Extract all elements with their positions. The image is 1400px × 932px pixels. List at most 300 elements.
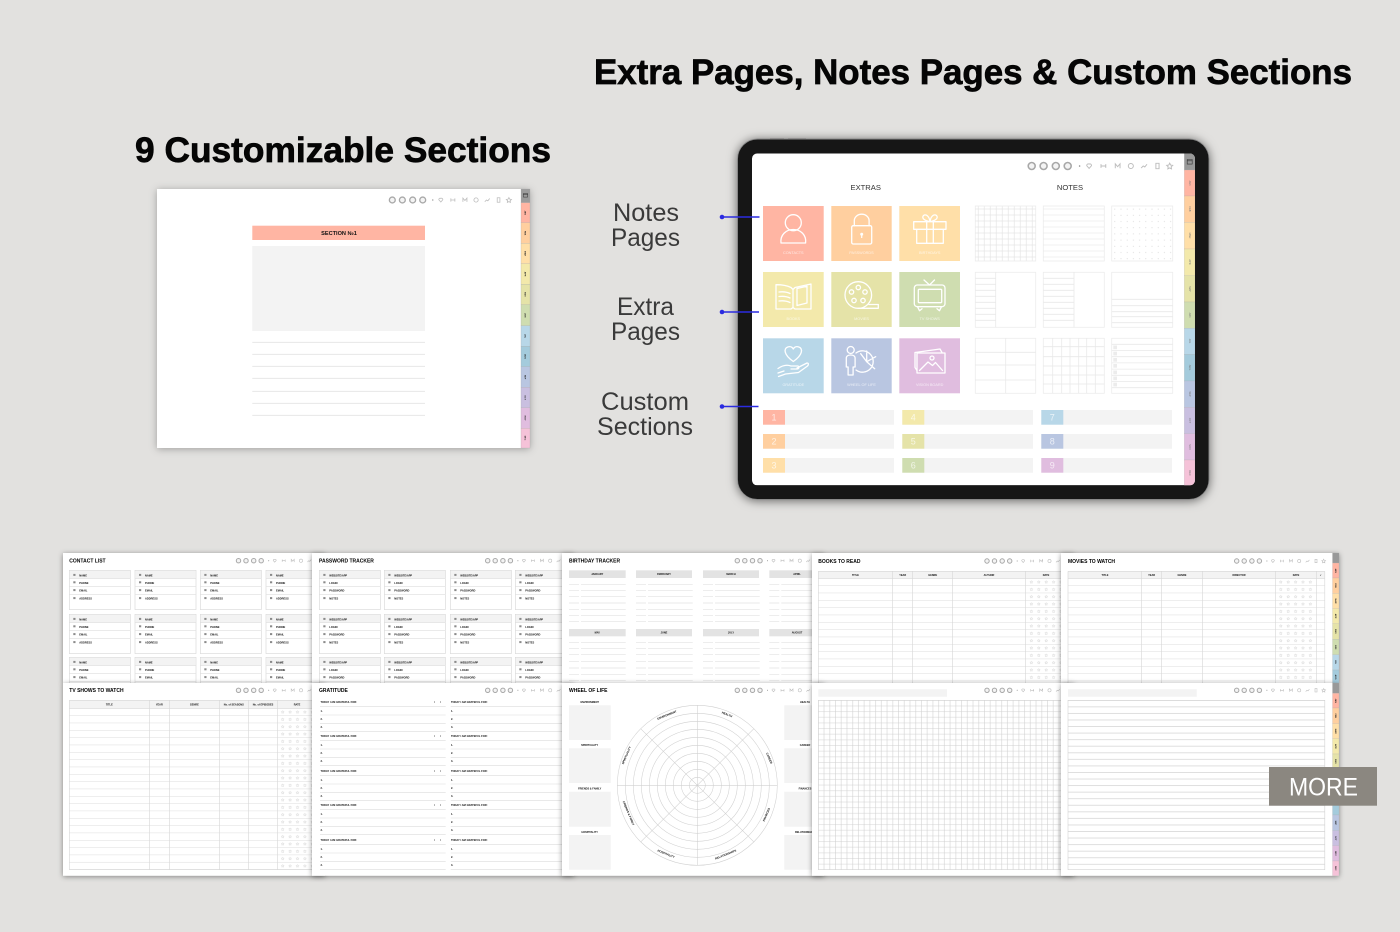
note thumbnails xyxy=(975,206,1173,393)
heading: wheel of life: WHEEL OF LIFE xyxy=(569,688,608,694)
panel: books to read page xyxy=(812,553,1076,683)
gratitude lists: 2. xyxy=(451,717,453,721)
gratitude lists: 1. xyxy=(451,778,453,782)
panel: section page preview: JAN xyxy=(524,211,527,215)
panel: section page preview: OCT xyxy=(524,395,526,400)
gratitude lists: 3. xyxy=(320,725,323,729)
password cards: NOTES xyxy=(394,641,404,645)
gratitude lists xyxy=(320,700,576,869)
contact cards: PHONE xyxy=(145,581,154,585)
contact cards: NAME xyxy=(276,574,284,578)
title field xyxy=(1068,689,1197,697)
tile: books xyxy=(763,272,824,327)
wheel chart: SPIRITUALITY xyxy=(621,746,632,765)
panel: section page preview: SEP xyxy=(524,375,526,380)
gratitude lists: TODAY I AM GRATEFUL FOR: xyxy=(320,734,357,738)
gratitude lists: 1. xyxy=(451,743,453,747)
month headers xyxy=(569,570,825,636)
contact cards: NAME xyxy=(79,661,87,665)
section header: SECTION №1 xyxy=(321,231,357,237)
wheel chart: HEALTH xyxy=(721,710,733,718)
panel: movies to watch page: MAY xyxy=(1334,629,1337,634)
toolbar xyxy=(1234,688,1326,692)
password cards: WEBSITE/APP xyxy=(525,574,543,578)
gratitude lists: / xyxy=(440,838,441,842)
gratitude lists: / xyxy=(440,803,441,807)
gratitude lists: 1. xyxy=(451,812,453,816)
books table: AUTHOR xyxy=(984,574,995,577)
wheel chart xyxy=(617,705,777,865)
panel: movies to watch page: JUL xyxy=(1334,660,1336,665)
contact cards: EMAIL xyxy=(276,633,284,637)
gratitude lists: TODAY I AM GRATEFUL FOR: xyxy=(451,700,488,704)
toolbar xyxy=(236,688,327,692)
heading: birthday tracker: BIRTHDAY TRACKER xyxy=(569,558,621,564)
password cards: PASSWORD xyxy=(394,633,410,637)
tablet body xyxy=(738,139,1209,500)
movies table: DIRECTOR xyxy=(1232,574,1246,577)
panel: lined notes page: OCT xyxy=(1334,836,1336,841)
password cards: PASSWORD xyxy=(329,589,345,593)
panel: movies to watch page: FEB xyxy=(1334,583,1336,588)
ruled lines xyxy=(1068,700,1325,870)
contact cards: EMAIL xyxy=(79,633,88,637)
section header xyxy=(252,226,425,240)
custom section bars: 8 xyxy=(1050,436,1055,446)
side note boxes: FINANCES xyxy=(799,787,812,790)
gratitude lists: / xyxy=(434,734,435,738)
password cards: LOGIN xyxy=(329,625,338,629)
gratitude lists: TODAY I AM GRATEFUL FOR: xyxy=(320,700,357,704)
wheel chart: FINANCES xyxy=(762,807,771,822)
toolbar icons xyxy=(389,197,511,203)
gratitude lists: / xyxy=(434,700,435,704)
custom section bars xyxy=(763,410,1172,473)
contact cards: EMAIL xyxy=(79,676,88,680)
tv table: TITLE xyxy=(106,703,113,706)
contact cards: NAME xyxy=(210,574,218,578)
password cards: NOTES xyxy=(329,641,339,645)
movies table: YEAR xyxy=(1148,574,1155,577)
panel: lined notes page: SEP xyxy=(1334,821,1336,826)
tv table: RATE xyxy=(294,703,301,706)
heading: extras: EXTRAS xyxy=(851,183,881,192)
tablet screen: OCT xyxy=(1188,418,1192,424)
month headers: MAY xyxy=(595,632,600,634)
tablet screen: JAN xyxy=(1188,181,1192,186)
tablet screen: MAR xyxy=(1188,233,1192,239)
gratitude lists: TODAY I AM GRATEFUL FOR: xyxy=(320,769,357,773)
panel: section page preview: MAR xyxy=(524,251,527,256)
tv table xyxy=(69,700,320,870)
password cards: WEBSITE/APP xyxy=(329,618,347,622)
password cards: WEBSITE/APP xyxy=(394,618,412,622)
tablet screen: APR xyxy=(1188,259,1192,265)
title: extra pages: Extra Pages, Notes Pages & Custom Sections xyxy=(594,53,1352,92)
gratitude lists: 3. xyxy=(320,828,323,832)
password cards: LOGIN xyxy=(525,581,534,585)
panel: grid notes page xyxy=(812,683,1076,876)
contact cards: PHONE xyxy=(145,668,154,672)
wheel chart: RELATIONSHIPS xyxy=(714,848,737,861)
tablet screen: DEC xyxy=(1188,470,1192,476)
panel: section page preview: APR xyxy=(524,272,527,277)
wheel chart: ENVIRONMENT xyxy=(657,709,678,721)
birthday lines xyxy=(569,584,826,680)
gratitude lists: 3. xyxy=(320,794,323,798)
label: extra pages: Pages xyxy=(611,318,680,346)
password cards: NOTES xyxy=(460,641,470,645)
gratitude lists: 1. xyxy=(320,847,323,851)
toolbar xyxy=(486,688,577,692)
password cards: NOTES xyxy=(329,597,339,601)
password cards: PASSWORD xyxy=(525,676,541,680)
contact cards: EMAIL xyxy=(276,676,284,680)
password cards: WEBSITE/APP xyxy=(525,661,543,665)
panel: movies to watch page: MAR xyxy=(1334,599,1337,604)
password cards: WEBSITE/APP xyxy=(329,661,347,665)
tv table: GENRE xyxy=(190,703,199,706)
contact cards: ADDRESS xyxy=(210,597,223,601)
tile: wheel of life: WHEEL OF LIFE xyxy=(847,383,876,387)
label: notes pages: Pages xyxy=(611,224,680,252)
panel: section page preview: JUL xyxy=(524,334,526,339)
month tabs xyxy=(521,189,530,448)
panel: section page preview xyxy=(157,189,530,448)
heading: password tracker: PASSWORD TRACKER xyxy=(319,558,374,564)
title: customizable sections: 9 Customizable Sections xyxy=(135,131,551,170)
gratitude lists: TODAY I AM GRATEFUL FOR: xyxy=(320,838,357,842)
password cards: PASSWORD xyxy=(394,589,410,593)
contact cards: EMAIL xyxy=(276,589,284,593)
contact cards: ADDRESS xyxy=(276,597,289,601)
gratitude lists: 3. xyxy=(320,863,323,867)
heading: tv shows: TV SHOWS TO WATCH xyxy=(69,688,124,694)
gratitude lists: 1. xyxy=(320,709,323,713)
panel: lined notes page xyxy=(1061,683,1339,876)
password cards: LOGIN xyxy=(329,581,338,585)
panel: movies to watch page: JUN xyxy=(1334,645,1336,650)
tile: tv shows xyxy=(899,272,960,327)
panel: section page preview: AUG xyxy=(524,354,527,359)
panel: section page preview: NOV xyxy=(524,416,526,421)
books table: YEAR xyxy=(899,574,906,577)
tv table: No. of EPISODES xyxy=(253,703,274,706)
tile: contacts: CONTACTS xyxy=(783,251,804,255)
panel: lined notes page: FEB xyxy=(1334,714,1336,718)
custom section bars: 4 xyxy=(911,412,916,422)
tablet screen xyxy=(752,154,1195,486)
contact cards: PHONE xyxy=(210,668,220,672)
panel: lined notes page: NOV xyxy=(1334,851,1336,856)
tile: vision board: VISION BOARD xyxy=(916,383,944,387)
password cards: NOTES xyxy=(460,597,470,601)
password cards: WEBSITE/APP xyxy=(329,574,347,578)
custom section bars: 1 xyxy=(771,412,777,422)
heading: contact list: CONTACT LIST xyxy=(69,558,106,564)
month headers: JUNE xyxy=(661,632,668,634)
heading: movies to watch: MOVIES TO WATCH xyxy=(1068,559,1115,565)
gratitude lists: / xyxy=(434,838,435,842)
contact cards: ADDRESS xyxy=(79,641,92,645)
heading: notes: NOTES xyxy=(1057,183,1083,192)
tile: vision board xyxy=(899,338,960,393)
toolbar xyxy=(985,559,1076,563)
contact cards: EMAIL xyxy=(145,676,153,680)
month headers: APRIL xyxy=(793,573,801,576)
contact cards: NAME xyxy=(276,618,284,622)
tile: gratitude: GRATITUDE xyxy=(782,383,805,387)
panel: wheel of life page xyxy=(562,683,826,876)
password cards: PASSWORD xyxy=(394,676,410,680)
toolbar xyxy=(236,558,327,563)
contact cards: PHONE xyxy=(276,581,285,585)
contact cards: NAME xyxy=(145,661,153,665)
gratitude lists: 2. xyxy=(320,717,323,721)
tv table: No. of SEASONS xyxy=(224,703,244,706)
password cards: PASSWORD xyxy=(460,633,476,637)
gratitude lists: 2. xyxy=(320,786,323,790)
custom section bars: 6 xyxy=(911,460,916,470)
password cards: LOGIN xyxy=(394,581,403,585)
panel: movies to watch page: AUG xyxy=(1334,675,1337,680)
tile: movies: MOVIES xyxy=(854,317,869,321)
label: custom sections xyxy=(597,388,693,441)
wheel chart: CAREER xyxy=(765,752,773,764)
more button xyxy=(1269,767,1377,806)
contact cards: NAME xyxy=(79,618,87,622)
contact cards: ADDRESS xyxy=(276,641,289,645)
panel: section page preview: FEB xyxy=(524,231,526,236)
panel: movies to watch page: JAN xyxy=(1334,568,1337,573)
arrow: extra pages pointer xyxy=(720,310,759,314)
grid xyxy=(818,700,1068,870)
gratitude lists: 2. xyxy=(320,855,323,859)
tablet screen: NOV xyxy=(1188,444,1192,450)
password cards: PASSWORD xyxy=(525,633,541,637)
contact cards: NAME xyxy=(79,574,87,578)
gratitude lists: 1. xyxy=(320,812,323,816)
tablet month tabs xyxy=(1184,154,1195,486)
gratitude lists: / xyxy=(440,734,441,738)
contact cards: PHONE xyxy=(210,625,220,629)
heading: books to read: BOOKS TO READ xyxy=(818,559,861,565)
tablet screen: SEP xyxy=(1188,391,1192,397)
gratitude lists: / xyxy=(440,700,441,704)
tablet screen: MAY xyxy=(1188,286,1192,292)
contact cards: ADDRESS xyxy=(145,597,158,601)
toolbar xyxy=(486,558,577,563)
password cards: WEBSITE/APP xyxy=(460,618,478,622)
gratitude lists: 3. xyxy=(451,794,453,798)
gratitude lists: TODAY I AM GRATEFUL FOR: xyxy=(451,838,488,842)
gratitude lists: TODAY I AM GRATEFUL FOR: xyxy=(320,803,357,807)
contact cards: PHONE xyxy=(79,668,89,672)
contact cards: NAME xyxy=(210,661,218,665)
panel: lined notes page: JAN xyxy=(1334,699,1337,703)
tile: wheel of life xyxy=(831,338,892,393)
panel: tablet xyxy=(738,138,1209,500)
password cards: NOTES xyxy=(394,597,404,601)
custom section bars: 3 xyxy=(771,460,777,470)
contact cards: EMAIL xyxy=(145,633,153,637)
password cards: PASSWORD xyxy=(329,676,345,680)
movies table: ✓ xyxy=(1320,574,1323,577)
arrow: custom sections pointer xyxy=(720,404,758,409)
panel: movies to watch page xyxy=(1061,553,1339,683)
password cards: LOGIN xyxy=(394,668,403,672)
contact cards: PHONE xyxy=(145,625,154,629)
label: custom sections: Custom xyxy=(601,388,689,416)
password cards: NOTES xyxy=(525,641,535,645)
contact cards: EMAIL xyxy=(79,589,88,593)
books table: RATE xyxy=(1043,574,1050,577)
gratitude lists: TODAY I AM GRATEFUL FOR: xyxy=(451,734,488,738)
contact cards: EMAIL xyxy=(210,589,219,593)
contact cards: NAME xyxy=(145,574,153,578)
password cards: PASSWORD xyxy=(460,676,476,680)
tv table: YEAR xyxy=(156,703,163,706)
side note boxes: FRIENDS & FAMILY xyxy=(578,787,602,790)
gratitude lists: 2. xyxy=(451,751,453,755)
password cards: WEBSITE/APP xyxy=(460,661,478,665)
panel: lined notes page: MAY xyxy=(1334,759,1337,764)
panel: section page preview: JUN xyxy=(524,313,526,318)
panel: lined notes page: DEC xyxy=(1334,866,1336,871)
password cards: PASSWORD xyxy=(329,633,345,637)
panel: section page preview: MAY xyxy=(524,292,527,297)
tablet screen: FEB xyxy=(1188,206,1192,212)
gratitude lists: 1. xyxy=(320,778,323,782)
contact cards: PHONE xyxy=(276,668,285,672)
password cards: WEBSITE/APP xyxy=(460,574,478,578)
arrow: notes pages pointer xyxy=(720,215,760,219)
label: notes pages: Notes xyxy=(613,199,679,227)
contact cards: PHONE xyxy=(79,625,89,629)
contact cards: EMAIL xyxy=(210,633,219,637)
books table: TITLE xyxy=(852,574,859,577)
gratitude lists: 3. xyxy=(451,863,453,867)
side note boxes: ENVIRONMENT xyxy=(580,701,599,704)
panel: gratitude page xyxy=(312,683,577,876)
contact cards: ADDRESS xyxy=(145,641,158,645)
tile: passwords xyxy=(831,206,892,261)
toolbar xyxy=(1234,559,1326,563)
contact cards: NAME xyxy=(210,618,218,622)
contact cards: EMAIL xyxy=(210,676,219,680)
panel: password tracker page xyxy=(312,553,577,697)
password cards: PASSWORD xyxy=(460,589,476,593)
label: extra pages xyxy=(611,293,680,346)
tile: birthdays xyxy=(899,206,960,261)
tile: books: BOOKS xyxy=(787,317,801,321)
gratitude lists: 3. xyxy=(451,725,453,729)
label: notes pages xyxy=(611,199,680,252)
side note boxes: RELATIONSHIPS xyxy=(795,831,815,834)
movies table: GENRE xyxy=(1178,574,1187,577)
gratitude lists: 2. xyxy=(320,751,323,755)
gratitude lists: 2. xyxy=(451,786,453,790)
label: custom sections: Sections xyxy=(597,413,693,441)
side note boxes: HEALTH xyxy=(800,701,810,704)
custom section bars: 2 xyxy=(771,436,777,446)
contact cards: ADDRESS xyxy=(79,597,92,601)
books table: GENRE xyxy=(928,574,937,577)
month headers: JULY xyxy=(728,632,734,634)
password cards: LOGIN xyxy=(394,625,403,629)
contact cards: ADDRESS xyxy=(210,641,223,645)
gratitude lists: 1. xyxy=(451,709,453,713)
password cards xyxy=(319,570,576,697)
month tabs xyxy=(1332,683,1339,876)
wheel chart: HOSPITALITY xyxy=(657,848,675,859)
heading: gratitude: GRATITUDE xyxy=(319,688,348,694)
gratitude lists: 3. xyxy=(451,828,453,832)
tile: passwords: PASSWORDS xyxy=(849,251,874,255)
tile: contacts xyxy=(763,206,824,261)
contact cards: PHONE xyxy=(210,581,220,585)
password cards: LOGIN xyxy=(525,668,534,672)
gratitude lists: 2. xyxy=(451,855,453,859)
panel: section page preview: DEC xyxy=(524,436,526,441)
title field xyxy=(818,689,947,697)
gratitude lists: 2. xyxy=(451,820,453,824)
custom section bars: 5 xyxy=(911,436,916,446)
side note boxes: CAREER xyxy=(800,744,810,747)
tablet toolbar xyxy=(1028,163,1173,169)
password cards: LOGIN xyxy=(460,625,469,629)
password cards: WEBSITE/APP xyxy=(394,661,412,665)
gratitude lists: 3. xyxy=(320,759,323,763)
gratitude lists: / xyxy=(434,769,435,773)
month tabs xyxy=(1332,553,1339,683)
side note boxes: SPIRITUALITY xyxy=(581,744,599,747)
month headers: FEBRUARY xyxy=(657,573,671,576)
movies table: RATE xyxy=(1293,574,1300,577)
gratitude lists: 1. xyxy=(451,847,453,851)
panel: lined notes page: APR xyxy=(1334,744,1337,749)
tile: gratitude xyxy=(763,338,824,393)
side note boxes: HOSPITALITY xyxy=(582,831,598,834)
label: extra pages: Extra xyxy=(617,293,674,321)
gratitude lists: 2. xyxy=(320,820,323,824)
panel: movies to watch page: APR xyxy=(1334,614,1337,619)
tablet screen: AUG xyxy=(1188,365,1192,370)
tile: movies xyxy=(831,272,892,327)
password cards: WEBSITE/APP xyxy=(394,574,412,578)
password cards: LOGIN xyxy=(329,668,338,672)
contact cards: PHONE xyxy=(276,625,285,629)
panel: lined notes page: MAR xyxy=(1334,729,1337,734)
ruled lines xyxy=(252,342,425,415)
toolbar xyxy=(735,688,826,692)
panel: contact list page xyxy=(63,553,327,697)
contact cards: NAME xyxy=(276,661,284,665)
movies table: TITLE xyxy=(1102,574,1109,577)
tile: birthdays: BIRTHDAYS xyxy=(919,251,941,255)
books table xyxy=(818,571,1068,683)
wheel chart: FRIENDS & FAMILY xyxy=(622,801,636,826)
password cards: LOGIN xyxy=(525,625,534,629)
gratitude lists: 3. xyxy=(451,759,453,763)
movies table xyxy=(1068,571,1325,683)
grey notes box xyxy=(252,246,425,331)
custom section bars: 9 xyxy=(1050,460,1055,470)
gratitude lists: TODAY I AM GRATEFUL FOR: xyxy=(451,803,488,807)
password cards: PASSWORD xyxy=(525,589,541,593)
password cards: LOGIN xyxy=(460,581,469,585)
month headers: MARCH xyxy=(726,573,736,576)
